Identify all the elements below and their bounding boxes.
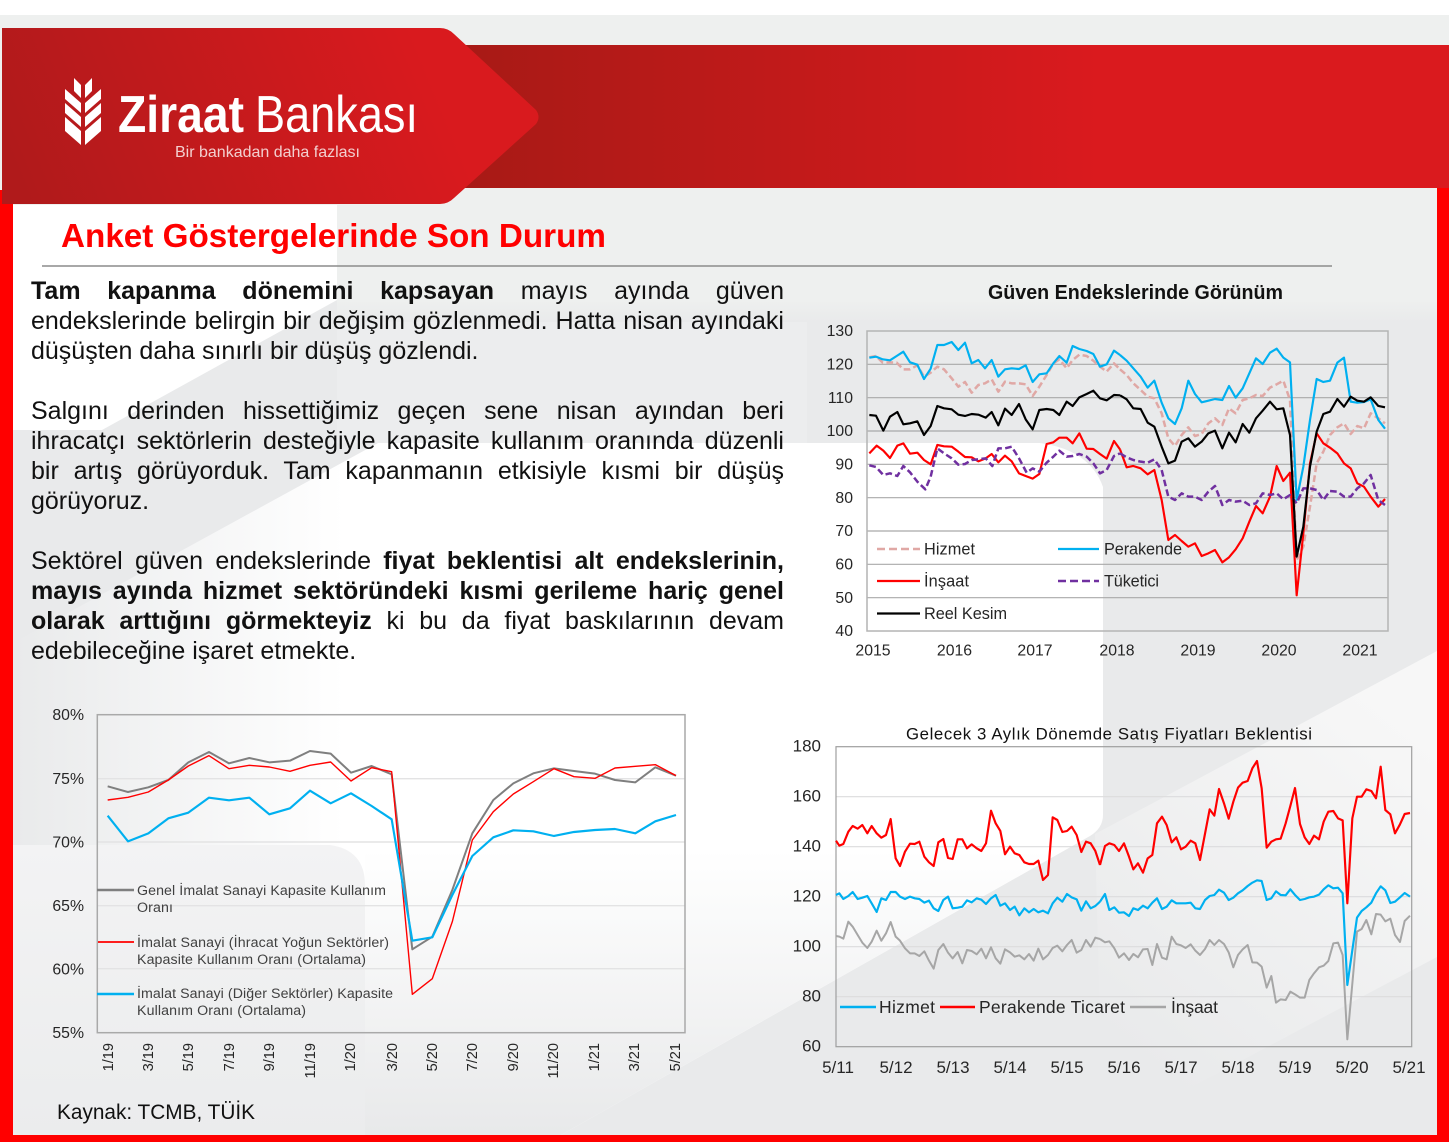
x axis labels: 1/20 bbox=[343, 1043, 359, 1071]
x axis labels: 1/21 bbox=[587, 1043, 603, 1071]
x axis labels: 1/19 bbox=[101, 1043, 117, 1071]
logo wordmark bbox=[118, 86, 418, 144]
paragraph 2 bbox=[31, 397, 784, 515]
paragraph 1: Tam kapanma dönemini kapsayan mayıs ayında güven bbox=[31, 277, 784, 305]
y axis labels: 60% bbox=[52, 962, 84, 978]
x axis labels: 2017 bbox=[1017, 642, 1053, 660]
y axis labels: 60 bbox=[835, 556, 853, 574]
x axis labels: 3/20 bbox=[385, 1043, 401, 1071]
y axis labels: 110 bbox=[828, 390, 853, 407]
x axis labels bbox=[855, 642, 1378, 660]
paragraph 3 bbox=[31, 547, 784, 665]
x axis labels: 5/21 bbox=[1392, 1058, 1426, 1077]
y axis labels: 80% bbox=[52, 707, 84, 724]
paragraph 2: görüyoruz. bbox=[31, 487, 149, 515]
legend: Kullanım Oranı (Ortalama) bbox=[137, 1003, 306, 1019]
y axis labels: 50 bbox=[835, 590, 853, 607]
x axis labels: 7/20 bbox=[465, 1043, 481, 1071]
y axis labels bbox=[52, 707, 84, 1042]
paragraph 1: düşüşten daha sınırlı bir düşüş gözlendi. bbox=[31, 337, 478, 365]
text block bbox=[31, 277, 784, 665]
y axis labels: 100 bbox=[827, 423, 853, 440]
back ribbon bbox=[440, 45, 1449, 188]
chart: kapasite kullanım oranı bbox=[52, 707, 686, 1078]
legend: İnşaat bbox=[924, 572, 969, 590]
x axis labels: 2019 bbox=[1180, 642, 1216, 660]
x axis labels: 9/19 bbox=[262, 1043, 278, 1071]
paragraph 3: Sektörel güven endekslerinde fiyat beklentisi alt endekslerinin, bbox=[31, 547, 784, 575]
series: Tüketici bbox=[869, 447, 1385, 505]
x axis labels bbox=[101, 1043, 684, 1078]
x axis labels: 5/15 bbox=[1050, 1058, 1084, 1077]
x axis labels: 2020 bbox=[1261, 642, 1297, 660]
paragraph 1: endekslerinde belirgin bir değişim gözlenmedi. Hatta nisan ayındaki bbox=[31, 307, 784, 335]
plot frame and grid bbox=[867, 331, 1388, 631]
logo wordmark: Ziraat bbox=[118, 86, 244, 144]
x axis labels: 5/17 bbox=[1164, 1058, 1198, 1077]
y axis labels: 70 bbox=[835, 523, 853, 540]
chart title: Güven Endekslerinde Görünüm bbox=[988, 282, 1283, 304]
chart: Güven Endekslerinde Görünüm bbox=[827, 282, 1389, 660]
plot frame and grid bbox=[836, 747, 1412, 1047]
x axis labels: 2018 bbox=[1099, 642, 1135, 660]
legend: Hizmet bbox=[879, 997, 935, 1017]
chart title: Gelecek 3 Aylık Dönemde Satış Fiyatları Beklentisi bbox=[906, 724, 1312, 744]
series: İhracat Yoğun bbox=[108, 756, 676, 994]
series: Hizmet bbox=[836, 880, 1410, 985]
plot frame and grid bbox=[97, 715, 685, 1033]
legend: Tüketici bbox=[1104, 572, 1159, 590]
series: İnşaat bbox=[836, 914, 1410, 1039]
x axis labels: 5/19 bbox=[181, 1043, 197, 1071]
y axis labels: 120 bbox=[793, 887, 821, 906]
title: Anket Göstergelerinde Son Durum bbox=[61, 217, 606, 254]
icon: wheat logo bbox=[65, 78, 101, 145]
y axis labels: 160 bbox=[793, 787, 821, 806]
paragraph 2: ihracatçı sektörlerin desteğiyle kapasite kullanım oranında düzenli bbox=[31, 427, 784, 455]
series: Diğer Sektörler bbox=[108, 791, 676, 941]
x axis labels: 7/19 bbox=[222, 1043, 238, 1071]
paragraph 3: mayıs ayında hizmet sektöründeki kısmi gerileme hariç genel bbox=[31, 577, 784, 605]
series: Perakende bbox=[869, 342, 1385, 500]
series: Reel Kesim bbox=[869, 391, 1385, 557]
y axis labels bbox=[827, 323, 853, 640]
tagline: Bir bankadan daha fazlası bbox=[175, 144, 360, 161]
y axis labels: 60 bbox=[802, 1037, 821, 1056]
y axis labels: 120 bbox=[827, 356, 853, 374]
x axis labels: 2016 bbox=[937, 642, 972, 660]
x axis labels: 5/19 bbox=[1278, 1058, 1312, 1077]
paragraph 1 bbox=[31, 277, 784, 365]
y axis labels: 80 bbox=[835, 490, 853, 507]
x axis labels: 3/21 bbox=[627, 1043, 643, 1071]
y axis labels: 90 bbox=[835, 456, 853, 474]
y axis labels: 55% bbox=[52, 1025, 84, 1042]
y axis labels: 100 bbox=[793, 937, 821, 956]
x axis labels: 3/19 bbox=[141, 1043, 157, 1071]
legend: Oranı bbox=[137, 900, 173, 916]
logo wordmark: Bankası bbox=[255, 86, 418, 144]
y axis labels: 40 bbox=[835, 623, 853, 640]
legend: Genel İmalat Sanayi Kapasite Kullanım bbox=[137, 881, 386, 899]
x axis labels: 5/11 bbox=[822, 1058, 854, 1077]
legend: Hizmet bbox=[924, 540, 975, 558]
y axis labels bbox=[793, 737, 821, 1056]
legend bbox=[97, 881, 393, 1019]
y axis labels: 75% bbox=[52, 771, 84, 788]
legend bbox=[877, 540, 1182, 623]
legend: İnşaat bbox=[1171, 997, 1218, 1017]
chart: Gelecek 3 Aylık Dönemde Satış Fiyatları Beklentisi bbox=[793, 724, 1426, 1077]
legend: Perakende bbox=[1104, 540, 1182, 558]
y axis labels: 130 bbox=[827, 323, 853, 340]
series: Hizmet bbox=[869, 355, 1385, 560]
x axis labels bbox=[822, 1058, 1426, 1077]
paragraph 3: olarak arttığını görmekteyiz ki bu da fiyat baskılarının devam bbox=[31, 607, 784, 635]
x axis labels: 5/20 bbox=[1335, 1058, 1369, 1077]
paragraph 2: bir artış görüyorduk. Tam kapanmanın etkisiyle kısmi bir düşüş bbox=[31, 457, 784, 485]
y axis labels: 140 bbox=[793, 837, 821, 856]
y axis labels: 180 bbox=[793, 737, 821, 756]
series: Genel İmalat bbox=[108, 751, 676, 949]
x axis labels: 5/12 bbox=[879, 1058, 913, 1077]
source note: Kaynak: TCMB, TÜİK bbox=[57, 1101, 255, 1124]
y axis labels: 80 bbox=[802, 987, 821, 1006]
x axis labels: 5/20 bbox=[425, 1043, 441, 1071]
y axis labels: 65% bbox=[52, 898, 84, 915]
x axis labels: 5/13 bbox=[936, 1058, 970, 1077]
x axis labels: 5/16 bbox=[1107, 1058, 1141, 1077]
legend: İmalat Sanayi (İhracat Yoğun Sektörler) bbox=[137, 933, 389, 951]
x axis labels: 2015 bbox=[855, 642, 891, 660]
x axis labels: 5/18 bbox=[1221, 1058, 1255, 1077]
legend: Perakende Ticaret bbox=[979, 997, 1125, 1017]
legend: Reel Kesim bbox=[924, 605, 1007, 623]
series: Perakende Ticaret bbox=[836, 761, 1410, 903]
x axis labels: 2021 bbox=[1342, 642, 1378, 660]
legend bbox=[840, 997, 1218, 1017]
legend: Kapasite Kullanım Oranı (Ortalama) bbox=[137, 952, 366, 968]
paragraph 2: Salgını derinden hissettiğimiz geçen sene nisan ayından beri bbox=[31, 397, 784, 425]
pentagon tag bbox=[2, 28, 538, 204]
legend: İmalat Sanayi (Diğer Sektörler) Kapasite bbox=[137, 984, 393, 1002]
x axis labels: 9/20 bbox=[506, 1043, 522, 1071]
x axis labels: 5/14 bbox=[993, 1058, 1027, 1077]
header banner bbox=[2, 28, 1449, 204]
x axis labels: 5/21 bbox=[668, 1043, 684, 1071]
paragraph 3: edebileceğine işaret etmekte. bbox=[31, 637, 356, 665]
y axis labels: 70% bbox=[52, 834, 84, 852]
x axis labels: 11/20 bbox=[546, 1043, 562, 1078]
x axis labels: 11/19 bbox=[303, 1043, 319, 1078]
series: İnşaat bbox=[869, 433, 1385, 595]
